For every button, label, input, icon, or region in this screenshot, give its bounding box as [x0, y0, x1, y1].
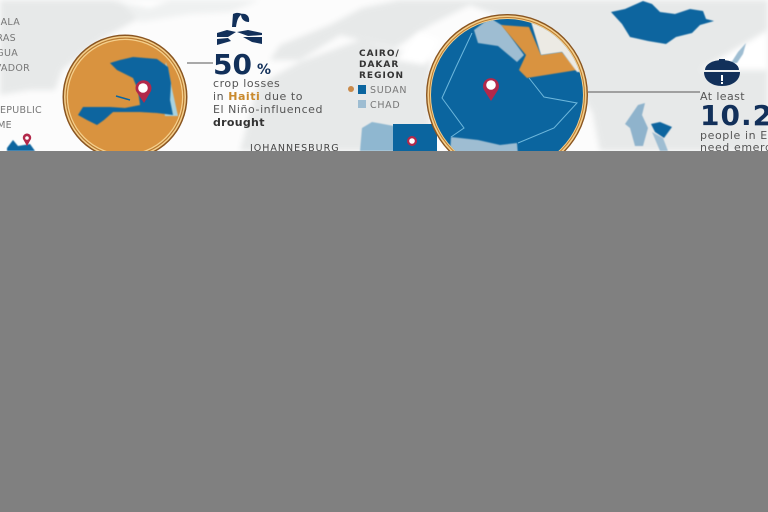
stat: 50% crop losses — [213, 48, 323, 129]
legend: Cairo/Dakar region — [348, 49, 407, 111]
circle: Haiti inset — [62, 34, 188, 160]
labels: Central America — [0, 17, 42, 131]
map pin: Caribbean — [23, 134, 31, 146]
cropped blank area — [0, 151, 768, 512]
stat: 10.2 people in Ethiopia: At least — [700, 90, 745, 103]
stat: 50% crop losses: drought — [213, 116, 265, 129]
map: Myanmar — [625, 103, 648, 146]
circle: Ethiopia inset — [426, 14, 588, 151]
stat: 50% crop losses: crop losses — [213, 77, 280, 90]
map pin: Ethiopia — [483, 78, 499, 101]
map: Arabian gap — [530, 23, 580, 73]
map: Japan or Korea region — [731, 43, 746, 63]
legend: Cairo/Dakar region: REGION — [359, 71, 404, 81]
map pin: Haiti — [135, 80, 152, 103]
map: Ethiopia borders — [442, 33, 577, 143]
stat: 50% crop losses: El Niño-influenced — [213, 103, 323, 116]
map: Sudan — [393, 124, 437, 151]
stat: 10.2 people in Ethiopia — [700, 90, 768, 154]
map: Thailand and Vietnam region — [651, 122, 672, 151]
label: Johannesburg: JOHANNESBURG — [249, 143, 340, 154]
icon: food bowl — [704, 59, 740, 86]
connector: Haiti — [187, 62, 213, 64]
stat: 50% crop losses: in Haiti due to — [213, 90, 303, 103]
legend: Cairo/Dakar region: CHAD — [370, 100, 400, 111]
map pin: Sudan — [407, 136, 417, 146]
icon: crop plant — [217, 13, 262, 45]
map: Caribbean small island — [7, 140, 35, 151]
map: Mongolia — [611, 1, 714, 44]
map: Eritrea region — [474, 18, 524, 62]
map: Yemen and Djibouti region — [501, 25, 577, 78]
stat: 50% crop losses: % — [257, 62, 271, 78]
legend: Cairo/Dakar region: CAIRO/ — [359, 49, 400, 59]
map: Chad — [360, 122, 394, 151]
map background — [0, 0, 768, 151]
connector: Ethiopia — [588, 91, 700, 93]
map: South Sudan and Kenya region — [450, 136, 518, 151]
stat: 50% crop losses: 50 — [213, 48, 252, 81]
legend: Cairo/Dakar region: SUDAN — [370, 85, 407, 96]
legend: Cairo/Dakar region: DAKAR — [359, 60, 399, 70]
map: Haiti — [78, 57, 178, 125]
